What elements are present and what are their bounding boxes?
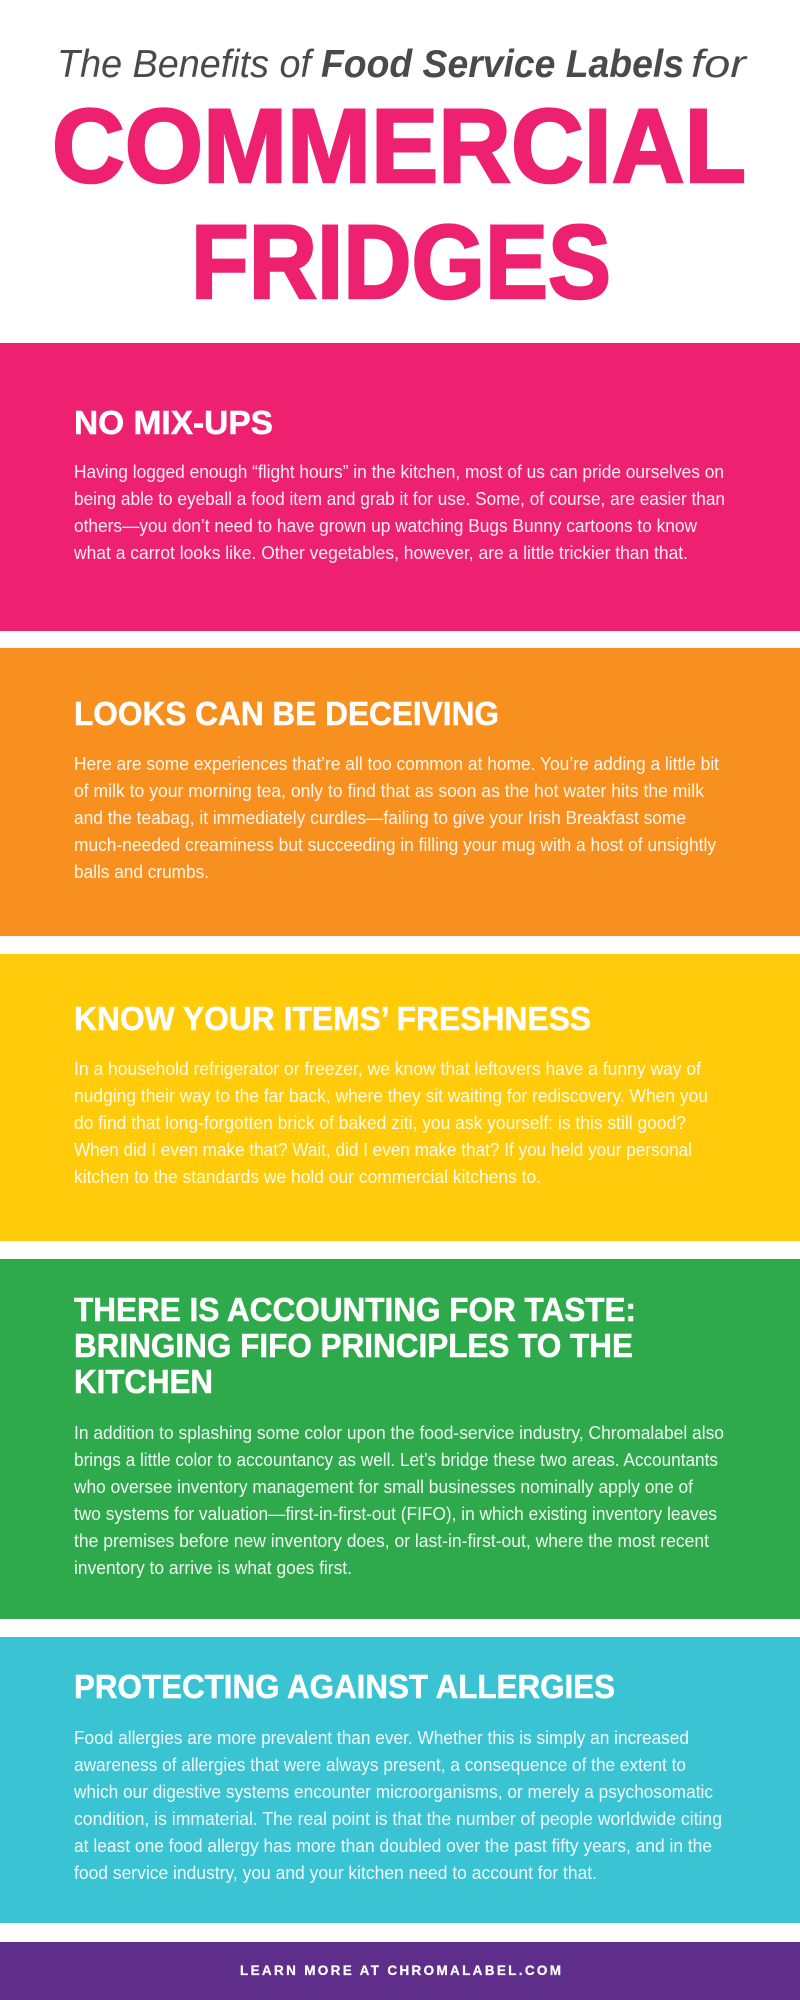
body text: know your items' freshness xyxy=(74,1059,708,1187)
body text: looks can be deceiving: much-needed creaminess but succeeding in filling your mug with a host of unsightly xyxy=(74,835,716,855)
body text: know your items' freshness: do find that long-forgotten brick of baked ziti, you ask yourself: is this still good? xyxy=(74,1113,686,1133)
body text: there is accounting for taste xyxy=(73,1423,724,1578)
body text: know your items' freshness: nudging their way to the far back, where they sit waiting for rediscovery. When you xyxy=(74,1086,708,1106)
heading: there is accounting for taste: BRINGING FIFO PRINCIPLES TO THE xyxy=(74,1327,633,1364)
body text: there is accounting for taste: In addition to splashing some color upon the food-service industry, Chromalabel also xyxy=(74,1423,724,1443)
footer link text: LEARN MORE AT CHROMALABEL.COM xyxy=(240,1963,561,1978)
body text: there is accounting for taste: inventory to arrive is what goes first. xyxy=(74,1558,352,1578)
subtitle: The Benefits of xyxy=(57,43,315,86)
body text: no mix-ups: others—you don’t need to have grown up watching Bugs Bunny cartoons to know xyxy=(74,516,698,536)
panel: protecting against allergies xyxy=(0,1637,800,1923)
body text: there is accounting for taste: two systems for valuation—first-in-first-out (FIFO), in which existing inventory leaves xyxy=(74,1504,717,1524)
body text: looks can be deceiving: balls and crumbs. xyxy=(74,862,209,882)
body text: protecting against allergies: condition, is immaterial. The real point is that the number of people worldwide citing xyxy=(74,1809,722,1829)
body text: protecting against allergies: which our digestive systems encounter microorganisms, or merely a psychosomatic xyxy=(73,1782,713,1802)
body text: protecting against allergies: Food allergies are more prevalent than ever. Whether this is simply an increased xyxy=(74,1728,689,1748)
body text: protecting against allergies: food service industry, you and your kitchen need to account for that. xyxy=(74,1863,597,1883)
footer bar xyxy=(0,1942,800,2000)
heading: there is accounting for taste: KITCHEN xyxy=(74,1363,213,1400)
body text: protecting against allergies: at least one food allergy has more than doubled over the past fifty years, and in the xyxy=(74,1836,712,1856)
title block xyxy=(52,43,748,321)
heading: no mix-ups: NO MIX-UPS xyxy=(74,404,273,441)
headline: COMMERCIAL xyxy=(52,88,746,205)
panel: no mix-ups xyxy=(0,343,800,631)
body text: know your items' freshness: When did I even make that? Wait, did I even make that? If you held your personal xyxy=(74,1140,692,1160)
subtitle xyxy=(57,43,748,86)
panel: looks can be deceiving xyxy=(0,648,800,936)
heading: there is accounting for taste xyxy=(74,1291,636,1400)
panel: there is accounting for taste xyxy=(0,1259,800,1619)
subtitle: Food Service Labels xyxy=(321,43,684,86)
body text: looks can be deceiving: and the teabag, it immediately curdles—failing to give your Irish Breakfast some xyxy=(74,808,686,828)
headline xyxy=(52,88,746,321)
body text: no mix-ups: what a carrot looks like. Other vegetables, however, are a little trickier than that. xyxy=(73,543,688,563)
body text: there is accounting for taste: brings a little color to accountancy as well. Let’s bridge these two areas. Accountants xyxy=(74,1450,718,1470)
body text: know your items' freshness: kitchen to the standards we hold our commercial kitchens to. xyxy=(74,1167,541,1187)
body text: protecting against allergies: awareness of allergies that were always present, a consequence of the extent to xyxy=(74,1755,686,1775)
panel: know your items' freshness xyxy=(0,954,800,1241)
body text: looks can be deceiving: Here are some experiences that’re all too common at home. You’re adding a little bit xyxy=(74,754,719,774)
body text: know your items' freshness: In a household refrigerator or freezer, we know that leftovers have a funny way of xyxy=(74,1059,702,1079)
heading: protecting against allergies: PROTECTING AGAINST ALLERGIES xyxy=(74,1668,615,1705)
body text: no mix-ups: being able to eyeball a food item and grab it for use. Some, of course, are easier than xyxy=(74,489,725,509)
body text: there is accounting for taste: who oversee inventory management for small businesses nominally apply one of xyxy=(73,1477,694,1497)
body text: no mix-ups: Having logged enough “flight hours” in the kitchen, most of us can pride ourselves on xyxy=(74,462,724,482)
body text: looks can be deceiving xyxy=(74,754,719,882)
heading: there is accounting for taste: THERE IS ACCOUNTING FOR TASTE: xyxy=(74,1291,636,1328)
subtitle: for xyxy=(691,43,748,86)
body text: protecting against allergies xyxy=(73,1728,722,1883)
body text: looks can be deceiving: of milk to your morning tea, only to find that as soon as the hot water hits the milk xyxy=(74,781,705,801)
headline: FRIDGES xyxy=(191,204,611,321)
heading: know your items' freshness: KNOW YOUR ITEMS’ FRESHNESS xyxy=(74,1000,591,1037)
heading: looks can be deceiving: LOOKS CAN BE DECEIVING xyxy=(74,695,499,732)
body text: no mix-ups xyxy=(73,462,725,563)
body text: there is accounting for taste: the premises before new inventory does, or last-in-first-out, where the most recent xyxy=(74,1531,709,1551)
